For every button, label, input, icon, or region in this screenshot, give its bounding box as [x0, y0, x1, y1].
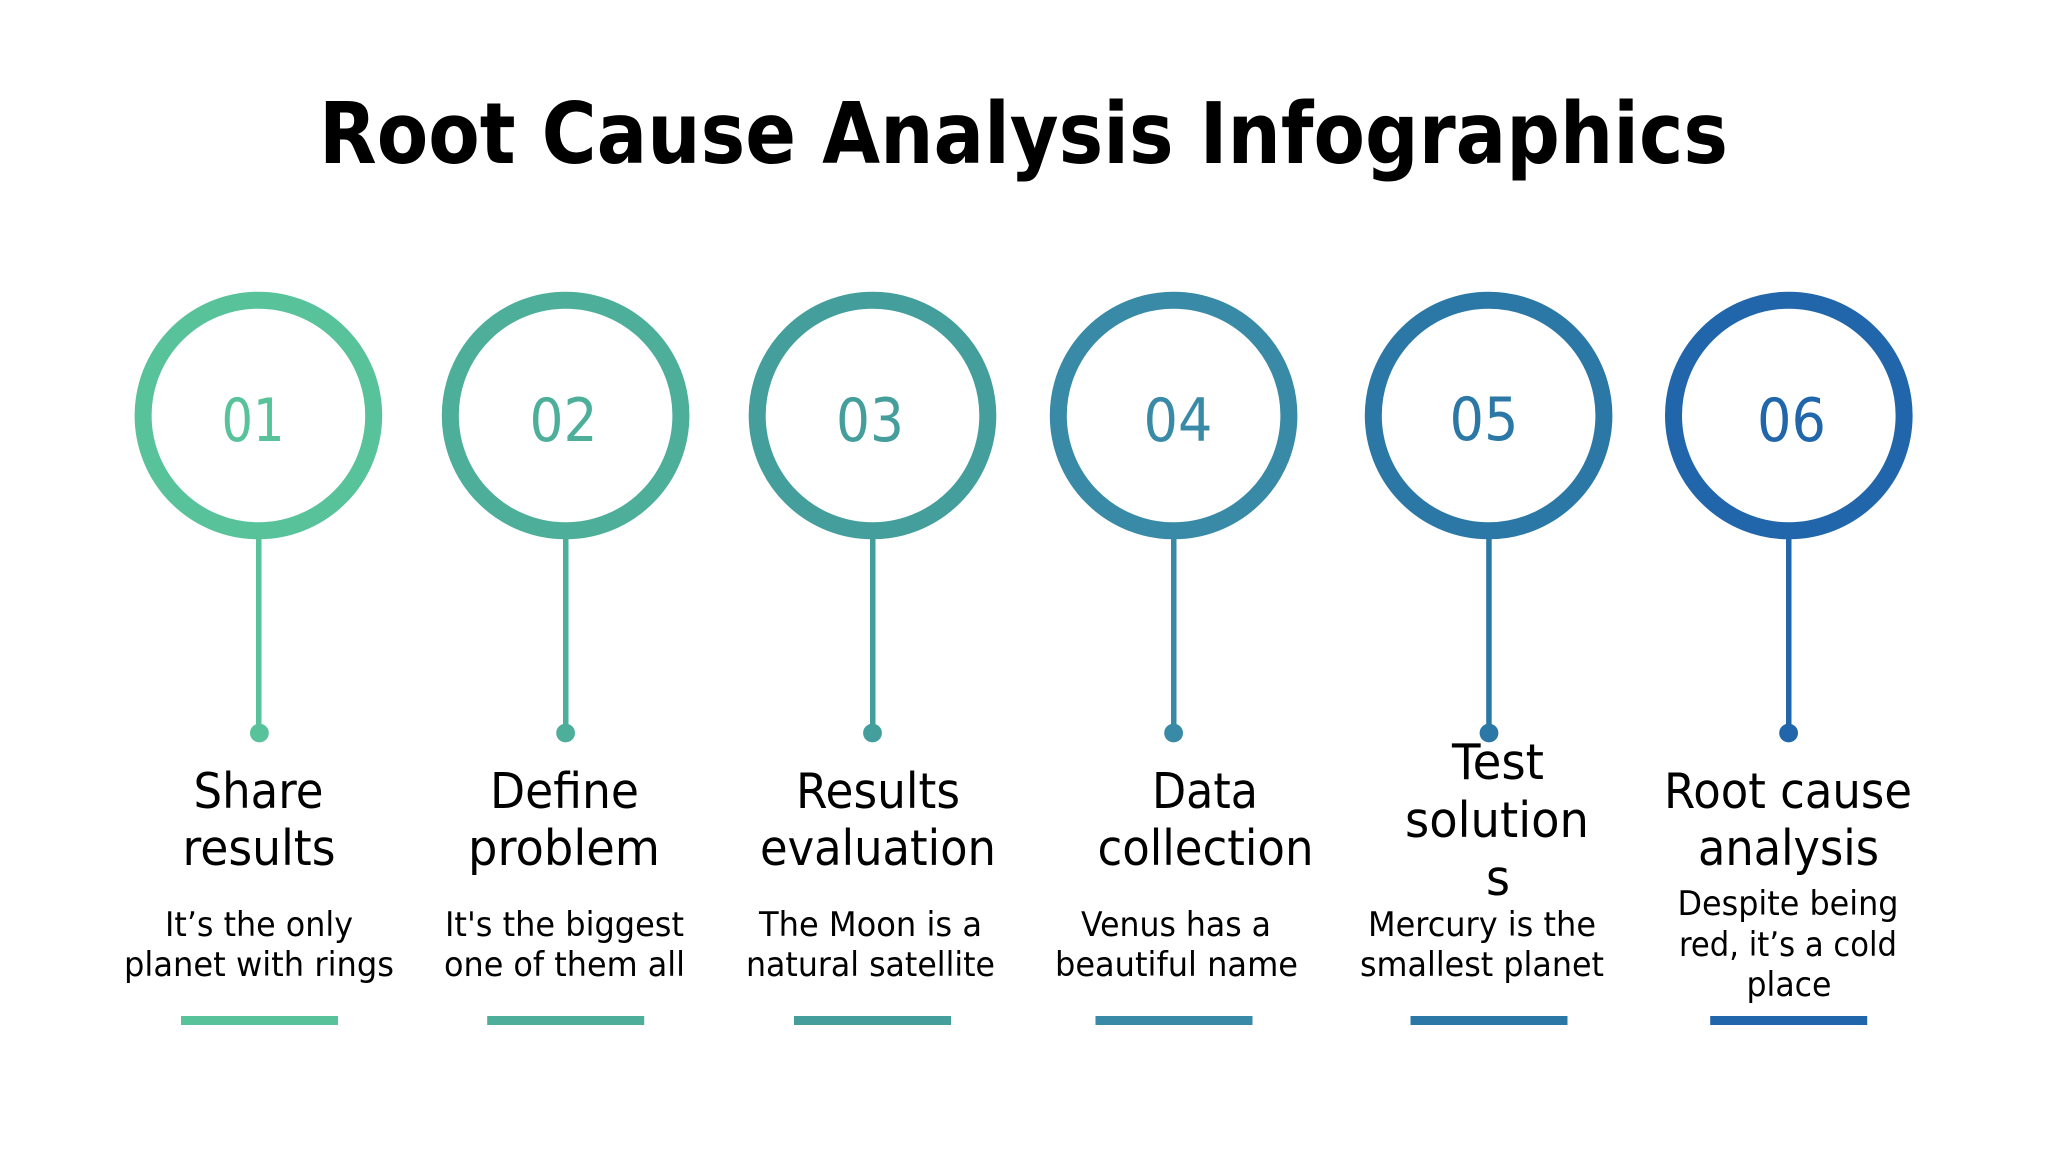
bar 04	[1096, 1016, 1252, 1025]
bar 05	[1410, 1016, 1568, 1025]
stem 01	[256, 538, 262, 728]
number 01: 01	[222, 386, 284, 456]
heading 05: solution	[1405, 792, 1589, 849]
stem 06	[1786, 538, 1792, 728]
heading 05: Test	[1451, 734, 1544, 791]
heading 06: analysis	[1698, 820, 1879, 877]
number 03: 03	[836, 386, 904, 456]
bar 03	[794, 1016, 951, 1025]
description 06: place	[1746, 965, 1832, 1004]
heading 04: Data	[1152, 763, 1258, 820]
description 06: red, it’s a cold	[1679, 925, 1897, 964]
description 02: It's the biggest	[445, 905, 684, 944]
heading 03: Results	[796, 763, 960, 820]
number 02: 02	[530, 386, 598, 456]
step 06: root cause analysis	[1664, 300, 1912, 1025]
description 05: smallest planet	[1360, 945, 1604, 984]
description 04: Venus has a	[1081, 905, 1271, 944]
number 05: 05	[1450, 385, 1518, 455]
heading 04: collection	[1098, 820, 1314, 877]
heading 05: s	[1486, 850, 1510, 907]
step 04: data collection	[1055, 300, 1314, 1025]
description 03: The Moon is a	[758, 905, 982, 944]
ring 04	[1058, 300, 1289, 531]
heading 03: evaluation	[760, 820, 996, 877]
stem 05	[1486, 538, 1492, 728]
number 04: 04	[1144, 386, 1212, 456]
bar 06	[1710, 1016, 1867, 1025]
description 06: Despite being	[1678, 884, 1898, 923]
dot 04	[1164, 724, 1183, 742]
ring 01	[143, 300, 374, 531]
description 01: It’s the only	[165, 905, 353, 944]
number 06: 06	[1757, 386, 1826, 456]
ring 02	[450, 300, 681, 531]
description 01: planet with rings	[124, 945, 394, 984]
description 03: natural satellite	[746, 945, 995, 984]
heading 06: Root cause	[1664, 763, 1912, 820]
description 04: beautiful name	[1055, 945, 1298, 984]
dot 01	[250, 724, 269, 742]
step 03: results evaluation	[746, 300, 996, 1025]
bar 01	[181, 1016, 338, 1025]
ring 03	[757, 300, 988, 531]
step 02: define problem	[444, 300, 685, 1025]
dot 05	[1480, 724, 1498, 742]
bar 02	[487, 1016, 644, 1025]
title: Root Cause Analysis Infographics	[319, 85, 1728, 184]
step 05: test solutions	[1360, 300, 1604, 1025]
ring 05	[1373, 300, 1604, 531]
dot 06	[1779, 724, 1798, 742]
dot 03	[863, 724, 882, 742]
description 02: one of them all	[444, 945, 685, 984]
heading 02: Define	[490, 763, 639, 820]
step 01: share results	[124, 300, 394, 1025]
heading 01: results	[182, 820, 336, 877]
heading 01: Share	[194, 763, 324, 820]
ring 06	[1674, 300, 1904, 531]
dot 02	[556, 724, 575, 742]
heading 02: problem	[468, 820, 660, 877]
stem 02	[563, 538, 568, 728]
stem 04	[1171, 538, 1176, 728]
stem 03	[870, 538, 876, 728]
description 05: Mercury is the	[1368, 905, 1596, 944]
